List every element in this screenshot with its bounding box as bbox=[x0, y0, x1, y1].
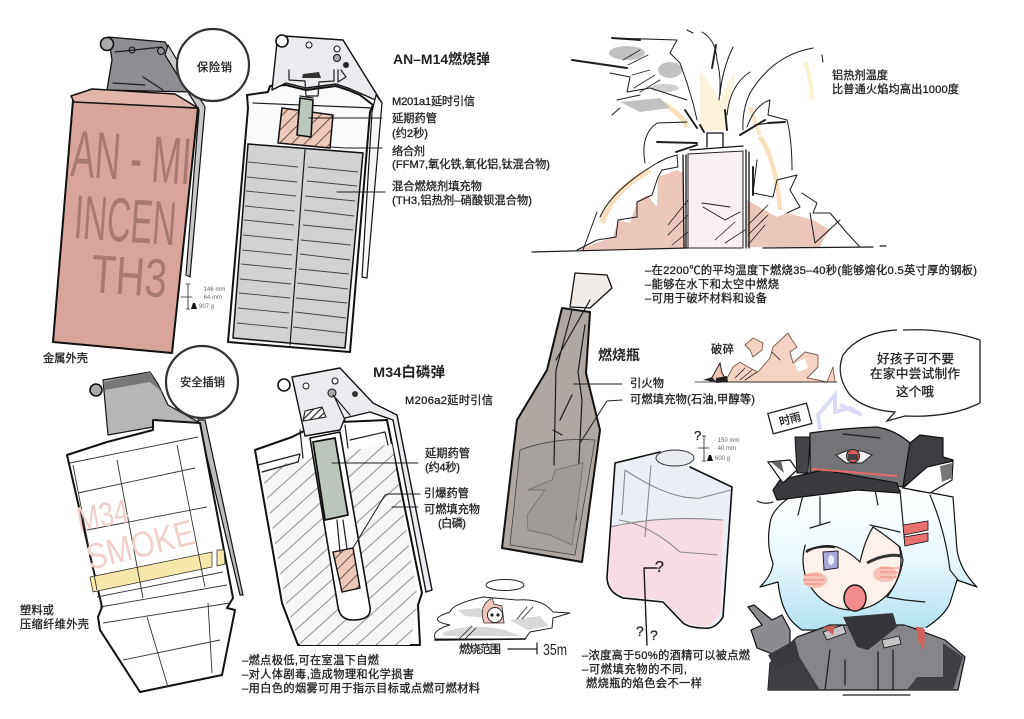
cat ears bbox=[768, 460, 953, 493]
canister markings bbox=[69, 116, 194, 309]
character: Shigure pointing bbox=[748, 427, 977, 695]
open eye bbox=[806, 547, 838, 570]
specs: AN-M14 dimensions: 907 g bbox=[199, 304, 214, 310]
label: plastic shell bbox=[20, 603, 89, 631]
delay tube and pink charge bbox=[278, 98, 333, 148]
title: M34: M34白磷弹 bbox=[373, 364, 445, 380]
uniform body bbox=[768, 613, 965, 695]
hair clip bbox=[903, 521, 928, 546]
hatching marks bbox=[623, 50, 768, 245]
molotov callouts bbox=[630, 376, 755, 406]
flame outline strokes bbox=[577, 30, 860, 250]
question marks: ? bbox=[655, 559, 664, 576]
tube assembly bbox=[310, 432, 370, 620]
title: molotov: 燃烧瓶 bbox=[598, 347, 640, 363]
name tag bbox=[768, 403, 812, 434]
label: metal shell: 金属外壳 bbox=[43, 351, 88, 365]
question marks bbox=[636, 428, 701, 643]
ring: safety pin callout: 保险销 bbox=[197, 60, 232, 74]
molotov bottle bbox=[502, 273, 622, 562]
speech bubble: 好孩子可不要 bbox=[877, 352, 954, 366]
leader lines bbox=[332, 463, 420, 548]
pale M34 SMOKE marking: SMOKE bbox=[82, 511, 199, 578]
canister wall bbox=[228, 85, 373, 352]
burn-range measure: 燃烧范围 bbox=[459, 642, 501, 656]
label: shatter: 破碎 bbox=[711, 342, 734, 356]
cap bbox=[773, 427, 953, 500]
ring: safety pin callout M34: 安全插销 bbox=[180, 375, 225, 389]
thermite bullet list bbox=[645, 263, 977, 305]
AN-M14 exterior illustration bbox=[53, 37, 205, 353]
ground line bbox=[532, 246, 886, 252]
M34 callouts bbox=[405, 393, 493, 530]
M34 bullet list bbox=[242, 653, 480, 695]
shattered bottle flames bbox=[695, 333, 837, 383]
AN-M14 callouts: (约2秒) bbox=[392, 126, 428, 140]
back hair bbox=[760, 487, 977, 630]
AN-M14 callouts: 络合剂 bbox=[392, 144, 425, 158]
icon: skull in flame bbox=[482, 598, 504, 623]
canister markings: INCEN bbox=[72, 183, 179, 259]
leader lines bbox=[574, 384, 622, 443]
M34 callouts: 引爆药管 bbox=[424, 486, 469, 500]
molotov callouts: 可燃填充物(石油,甲醇等) bbox=[630, 392, 755, 406]
thermite temperature note: 比普通火焰均高出1000度 bbox=[832, 82, 959, 96]
liquid inside bbox=[510, 439, 595, 555]
specs: flask dimensions: · 150 mm bbox=[714, 438, 739, 444]
question marks: ? bbox=[636, 623, 644, 639]
thermite bullet list: –可用于破坏材料和设备 bbox=[645, 291, 767, 305]
icon: grey spoon and lever bbox=[100, 37, 205, 277]
AN-M14 callouts: 混合燃烧剂填充物 bbox=[392, 179, 482, 193]
grey filler TH3 bbox=[233, 144, 363, 348]
ring: safety pin callout bbox=[177, 29, 249, 101]
M34 cutaway diagram bbox=[255, 368, 432, 645]
halo bbox=[818, 395, 862, 430]
spoon bbox=[278, 368, 432, 592]
shell body bbox=[67, 420, 235, 692]
burn-range measure bbox=[459, 642, 567, 659]
speech bubble: 在家中尝试制作 bbox=[870, 366, 960, 381]
specs: AN-M14 dimensions: · 64 mm bbox=[200, 295, 222, 301]
canister markings: AN - MI bbox=[69, 116, 194, 198]
specs: flask dimensions: 600 g bbox=[715, 456, 730, 462]
specs: AN-M14 dimensions: · 146 mm bbox=[200, 287, 225, 293]
title: AN-M14: AN–M14燃烧弹 bbox=[393, 51, 490, 67]
AN-M14 callouts: M201a1延时引信 bbox=[392, 94, 475, 108]
M34 exterior illustration bbox=[67, 372, 243, 692]
M34 callouts: (约4秒) bbox=[425, 460, 460, 474]
question marks: ? bbox=[650, 627, 658, 643]
flames colour wash bbox=[577, 46, 830, 250]
molotov bullet list: –浓度高于50%的酒精可以被点燃 bbox=[582, 648, 750, 662]
AN-M14 callouts: (FFM7,氧化铁,氧化铝,钛混合物) bbox=[392, 157, 550, 171]
bottle glass bbox=[502, 308, 600, 562]
M34 callouts: (白磷) bbox=[438, 516, 466, 530]
AN-M14 cutaway diagram bbox=[228, 35, 385, 352]
AN-M14 callouts: (TH3,铝热剂–硝酸钡混合物) bbox=[392, 193, 532, 207]
molotov bullet list bbox=[582, 648, 750, 690]
burn-range cloud with skull bbox=[435, 580, 570, 640]
molotov bullet list: 燃烧瓶的焰色会不一样 bbox=[586, 676, 702, 690]
hatched white phosphorus filler bbox=[262, 444, 418, 645]
grey spoon bbox=[90, 372, 243, 595]
pale M34 SMOKE marking: M34 bbox=[74, 492, 132, 539]
M34 callouts: 延期药管 bbox=[425, 446, 470, 460]
wink bbox=[867, 555, 901, 563]
pale M34 SMOKE marking bbox=[74, 492, 199, 578]
cap badge bbox=[836, 450, 872, 463]
rag wick bbox=[570, 273, 612, 308]
speech bubble: 这个哦 bbox=[896, 384, 934, 399]
thermite temperature note: 铝热剂温度 bbox=[832, 68, 888, 82]
thermite explosion illustration bbox=[532, 30, 886, 252]
body bbox=[255, 420, 422, 645]
pink metal canister bbox=[53, 89, 198, 353]
rag inside bbox=[553, 300, 590, 520]
pointing hand bbox=[748, 605, 800, 668]
leader lines bbox=[309, 118, 385, 192]
M34 bullet list: –用白色的烟雾可用于指示目标或点燃可燃材料 bbox=[242, 681, 480, 695]
M34 callouts: M206a2延时引信 bbox=[405, 393, 493, 407]
burn-range measure: 35m bbox=[543, 642, 567, 659]
M34 callouts: 可燃填充物 bbox=[424, 502, 480, 516]
name tag: 时雨 bbox=[778, 410, 802, 429]
thermite temperature note bbox=[832, 68, 959, 96]
thermite bullet list: –能够在水下和太空中燃烧 bbox=[645, 277, 779, 291]
M34 bullet list: –对人体剧毒,造成物理和化学损害 bbox=[242, 667, 414, 681]
AN-M14 callouts bbox=[392, 94, 550, 207]
AN-M14 callouts: 延期药管 bbox=[392, 111, 437, 125]
burning canister bbox=[688, 151, 743, 248]
speech bubble bbox=[840, 330, 980, 421]
plastic flask with liquid bbox=[607, 428, 732, 645]
molotov bullet list: –可燃填充物的不同, bbox=[582, 662, 687, 676]
canister markings: TH3 bbox=[89, 244, 169, 309]
fringe and front lock bbox=[795, 487, 950, 628]
label: plastic shell: 压缩纤维外壳 bbox=[20, 617, 89, 631]
thermite bullet list: –在2200℃的平均温度下燃烧35–40秒(能够熔化0.5英寸厚的钢板) bbox=[645, 263, 977, 277]
question marks: ? bbox=[694, 428, 701, 443]
spoon and fuze head bbox=[272, 35, 382, 278]
face bbox=[803, 510, 901, 610]
molotov callouts: 引火物 bbox=[630, 376, 664, 390]
specs: flask dimensions: · 40 mm bbox=[714, 446, 736, 452]
specs: flask dimensions bbox=[698, 436, 739, 462]
ring: safety pin callout M34 bbox=[166, 346, 238, 418]
mouth bbox=[844, 585, 866, 611]
label: plastic shell: 塑料或 bbox=[20, 603, 54, 617]
cap and can strokes bbox=[683, 133, 749, 248]
specs: AN-M14 dimensions bbox=[181, 284, 225, 310]
blush bbox=[803, 566, 904, 588]
M34 bullet list: –燃点极低,可在室温下自燃 bbox=[242, 653, 379, 667]
